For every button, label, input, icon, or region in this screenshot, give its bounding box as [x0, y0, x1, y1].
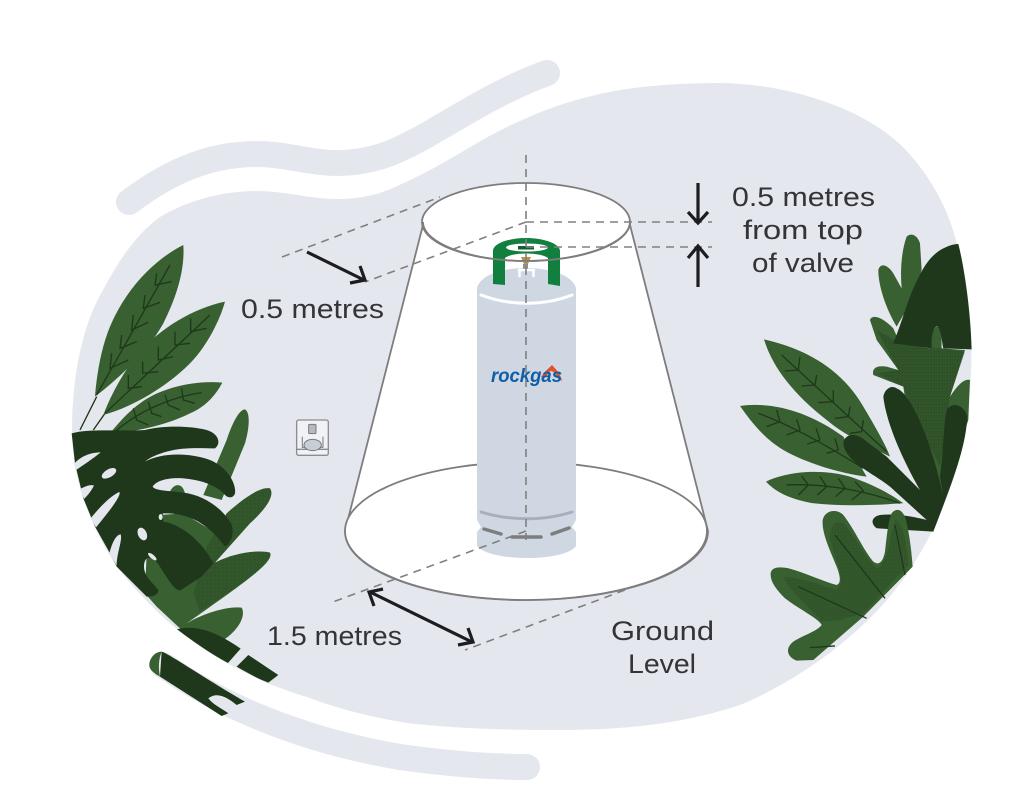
right bottom leaf stipple	[783, 520, 908, 622]
left stipple	[193, 488, 271, 612]
background blob	[72, 83, 971, 730]
label: 1.5 metres: 1.5 metres	[267, 621, 402, 651]
cylinder base dashes	[484, 528, 569, 537]
monstera leaf	[72, 427, 235, 597]
band leaf tip	[149, 652, 162, 677]
arrows	[307, 183, 708, 645]
socket outlet	[302, 437, 323, 447]
left plant	[80, 245, 225, 433]
label: ground level: Level	[628, 649, 696, 679]
monstera and back fingers	[72, 409, 271, 640]
arrow: height down	[688, 183, 708, 223]
cylinder top highlight	[481, 295, 572, 303]
right dark front leaves	[843, 387, 967, 532]
gas cylinder	[477, 238, 576, 558]
cone base ellipse	[345, 462, 707, 600]
top swoosh	[129, 73, 547, 202]
dashed guide lines	[282, 155, 712, 650]
label: 0.5 metres from top of valve: from top	[743, 215, 863, 245]
lower band leaf	[149, 628, 278, 716]
rockgas logo	[491, 365, 562, 387]
socket icon	[297, 420, 328, 455]
monstera gaps	[74, 452, 163, 566]
cone top ellipse	[422, 183, 630, 261]
label: ground level: Ground	[611, 616, 714, 646]
green collar	[493, 238, 560, 286]
cylinder body	[477, 268, 576, 558]
left leaves	[95, 245, 225, 433]
socket switch	[309, 424, 316, 434]
label: 0.5 metres from top of valve: 0.5 metres	[732, 182, 875, 212]
right bottom leaf	[771, 510, 913, 661]
label: 0.5 metres: 0.5 metres	[241, 294, 384, 324]
valve	[521, 257, 531, 264]
label: 0.5 metres from top of valve: of valve	[752, 248, 854, 278]
right stippled back leaf	[870, 317, 970, 497]
socket plate	[297, 420, 328, 455]
label: 0.5 metres from top of valve	[732, 182, 875, 278]
arrow: height up	[688, 246, 708, 287]
right sprig	[878, 235, 938, 327]
clearance cone	[345, 183, 708, 600]
arrow: base radius	[369, 589, 473, 645]
right leaves	[740, 339, 903, 505]
right plant	[740, 235, 972, 661]
left stems	[80, 397, 105, 430]
cone rim front line	[423, 222, 630, 261]
bottom swoosh	[163, 665, 527, 767]
left back fingers	[145, 409, 271, 640]
cylinder lower band	[481, 512, 572, 519]
cone body	[345, 225, 708, 600]
logo text: rockgas	[491, 366, 562, 387]
arrow: top radius	[307, 252, 365, 283]
logo flame	[541, 365, 562, 381]
label: ground level	[611, 616, 714, 679]
left leaf veins	[97, 265, 210, 432]
right leaf veins	[758, 355, 900, 503]
right dark top leaf	[893, 244, 972, 349]
right bottom leaf veins	[798, 525, 905, 648]
